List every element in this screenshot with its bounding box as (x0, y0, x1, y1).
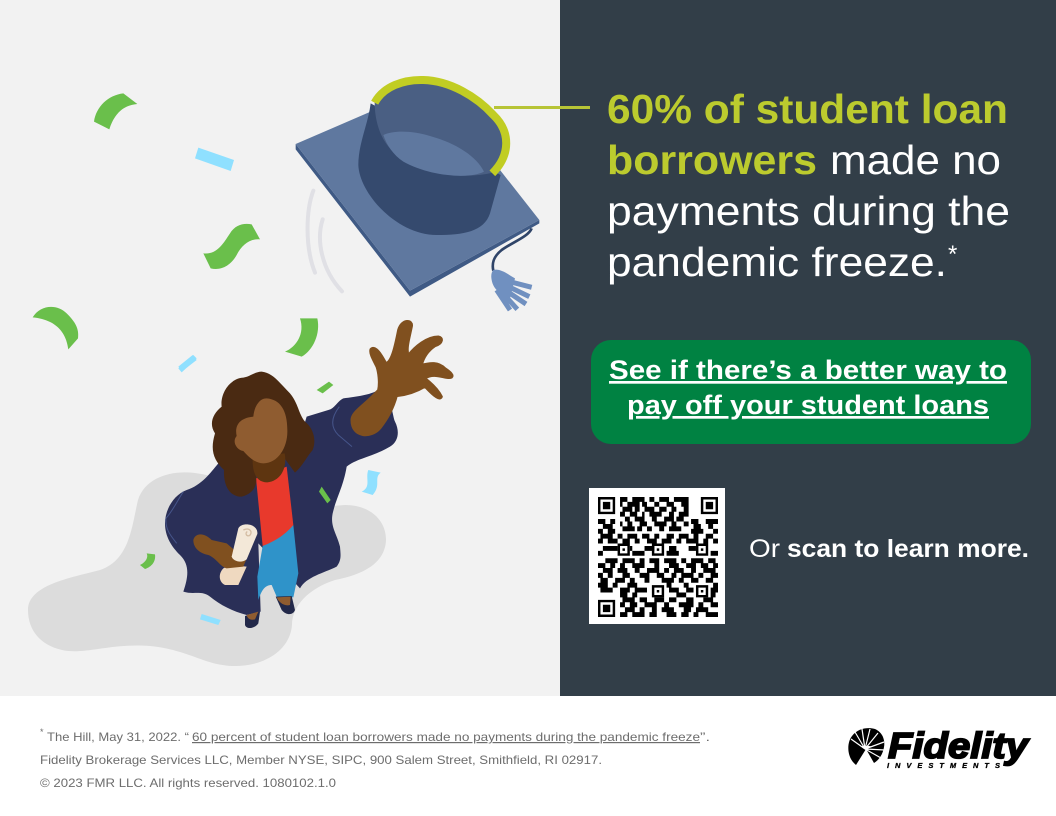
button: call to action (591, 340, 1031, 444)
logo: Fidelity Investments: INVESTMENTS (887, 761, 1000, 770)
face (235, 398, 287, 463)
icon: sunburst (848, 728, 885, 765)
shoes (245, 596, 295, 628)
icon: graduation cap (296, 80, 539, 310)
panel: illustration background (0, 0, 560, 696)
button: call to action: pay off your student loans (627, 390, 989, 420)
shirt (256, 467, 293, 546)
lower hand (193, 534, 246, 568)
tassel (491, 270, 532, 310)
panel: dark message panel (560, 0, 1056, 696)
footnotes: 60 percent of student loan borrowers made no payments during the pandemic freeze (192, 730, 700, 744)
logo: Fidelity Investments: Fidelity (888, 725, 1030, 766)
confetti: around graduate (178, 318, 333, 393)
headline: borrowers (607, 137, 817, 183)
text: scan prompt: scan to learn more. (787, 535, 1029, 563)
button: call to action: See if there’s a better way to (609, 355, 1007, 385)
diploma scroll (232, 524, 257, 562)
confetti: upper left (33, 93, 260, 372)
headline: * (948, 241, 957, 268)
text: scan prompt: Or (749, 535, 780, 563)
headline: made no (830, 137, 1001, 183)
footnotes: ”. (700, 730, 710, 744)
headline (607, 86, 1010, 285)
neck (253, 453, 285, 482)
footnotes: © 2023 FMR LLC. All rights reserved. 1080102.1.0 (40, 776, 336, 790)
headline: payments during the (607, 188, 1010, 234)
jeans (257, 525, 298, 600)
illustration: graduate (140, 318, 452, 628)
diploma lower roll (220, 565, 247, 585)
headline: 60% of student loan (607, 86, 1008, 132)
footnotes: Fidelity Brokerage Services LLC, Member NYSE, SIPC, 900 Salem Street, Smithfield, RI 02917. (40, 753, 602, 767)
QR code (589, 488, 725, 624)
confetti: in front of and below graduate (140, 470, 381, 625)
gown (165, 390, 398, 615)
raised arm and hand (352, 321, 452, 435)
logo: Fidelity Investments (848, 725, 1030, 770)
callout line from cap to headline (494, 106, 590, 109)
footnotes: The Hill, May 31, 2022. “ (47, 730, 189, 744)
hair (212, 372, 314, 497)
footnotes (40, 727, 710, 790)
footnotes: * (40, 727, 44, 737)
shadow blob under graduate (28, 472, 386, 666)
headline: pandemic freeze. (607, 239, 947, 285)
